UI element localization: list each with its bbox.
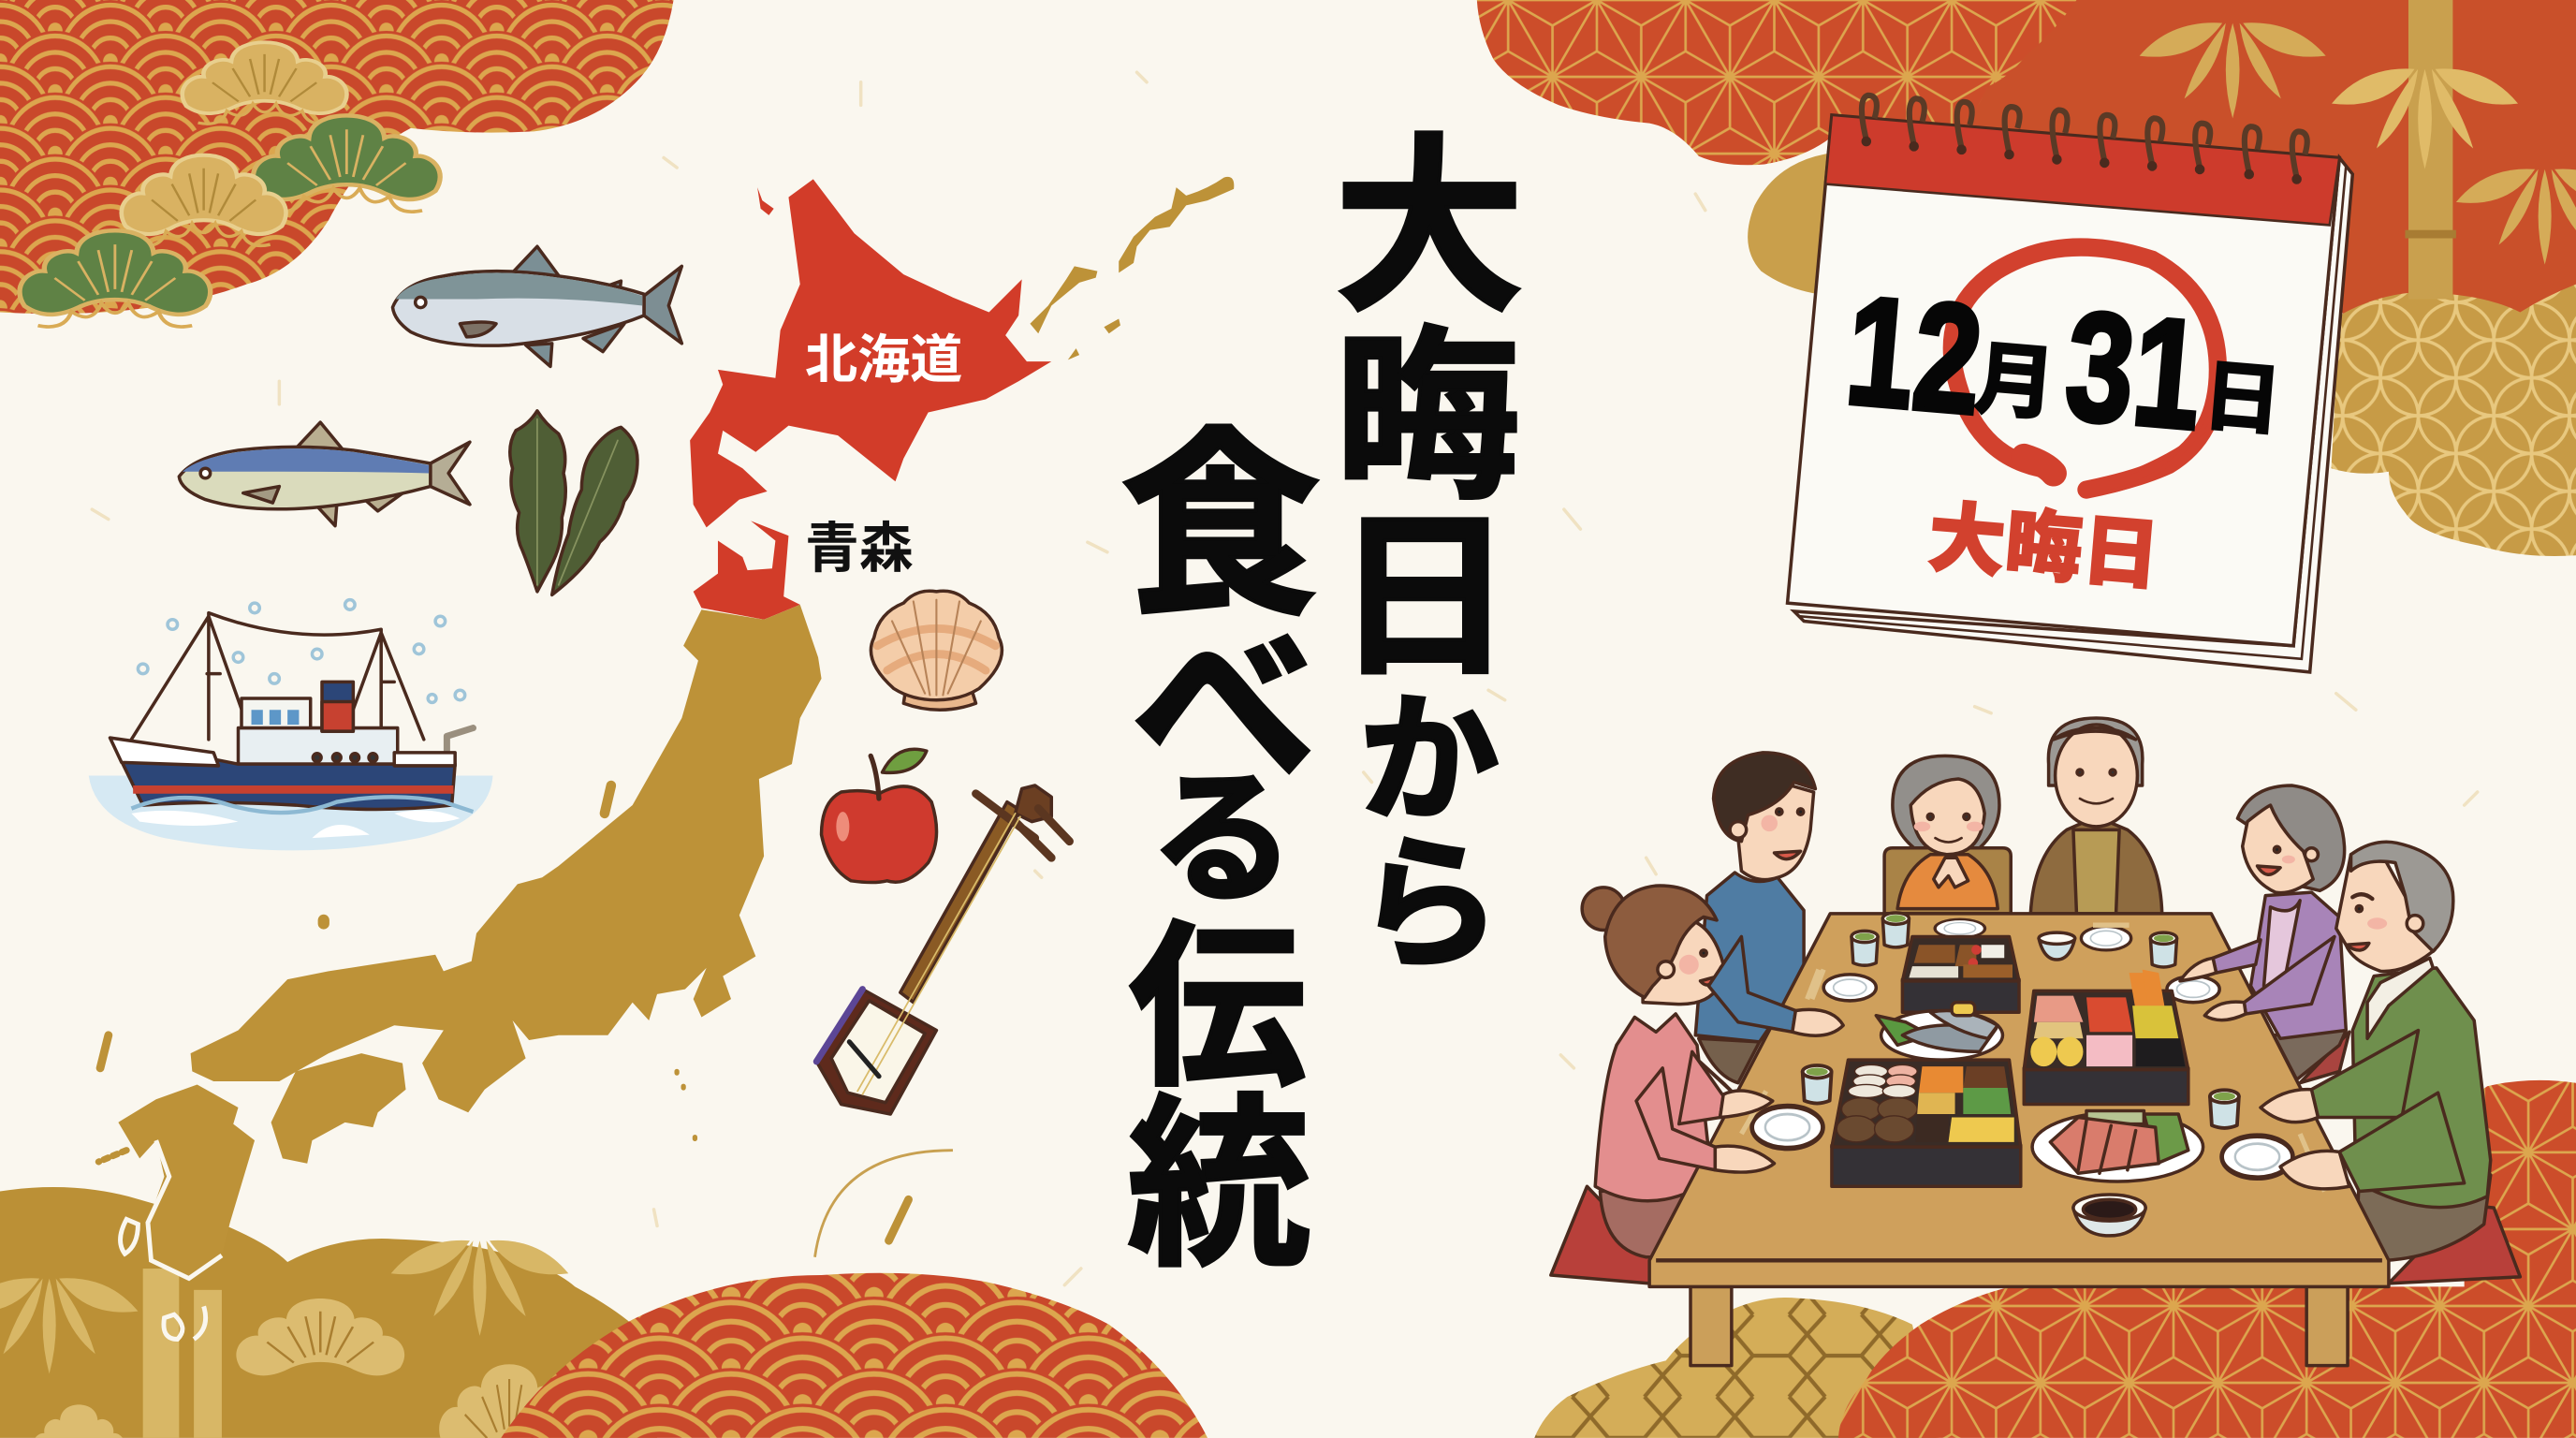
gold circle behind calendar <box>1748 151 1856 296</box>
Honshu <box>191 605 822 1112</box>
small islands <box>98 785 909 1240</box>
shippo gold panel <box>2331 285 2576 556</box>
daughter, pink sweater body and head <box>1551 886 1738 1284</box>
べ: べ <box>1132 606 1316 812</box>
top-right red backdrop with asanoha <box>1477 0 2576 556</box>
calendar <box>1788 95 2352 672</box>
icon: kelp <box>510 411 637 594</box>
Shikoku <box>271 1053 406 1164</box>
Rishiri island <box>757 187 774 215</box>
red header <box>1825 115 2339 225</box>
grandfather centre <box>2030 718 2162 914</box>
Aomori <box>694 521 800 620</box>
Hokkaido <box>690 179 1051 527</box>
rigging <box>131 613 424 740</box>
bottom-right gold hexagon panel <box>1534 1298 1939 1438</box>
bamboo leaves <box>0 1240 568 1373</box>
green tea cups <box>1803 913 2239 1128</box>
arms and hands over the table <box>1636 936 2465 1192</box>
small dish of kuromame <box>2073 1195 2145 1236</box>
る: る <box>1150 758 1295 920</box>
Kuril islands <box>1030 177 1234 360</box>
31: 31 <box>2060 279 2208 462</box>
daughter arms <box>1679 1051 1723 1124</box>
son arm <box>1708 936 1795 1032</box>
page stack <box>1794 158 2352 672</box>
食: 食 <box>1120 416 1321 639</box>
か: か <box>1359 682 1500 839</box>
right man, green sweater body and head <box>2336 842 2520 1284</box>
title: right column <box>1334 123 1525 986</box>
label: Aomori: 青森 <box>805 505 914 583</box>
family dinner scene <box>1551 718 2520 1366</box>
bottom-right asanoha panel <box>1838 1080 2576 1438</box>
table legs <box>1690 1286 2348 1366</box>
日: 日 <box>2199 332 2287 452</box>
gold pine 2 <box>122 155 286 245</box>
icon: scallop <box>871 591 1002 710</box>
right woman arms <box>2213 940 2261 973</box>
sea <box>89 775 493 850</box>
12: 12 <box>1840 264 1988 447</box>
bubbles <box>138 600 465 702</box>
table top <box>1649 914 2389 1286</box>
jubako box: right <box>2024 970 2188 1105</box>
ら: ら <box>1357 824 1501 986</box>
bamboo stalk <box>2405 0 2456 299</box>
晦: 晦 <box>1335 314 1520 521</box>
pine decorations, top left <box>20 42 440 327</box>
title: left column <box>1120 416 1321 1288</box>
plate of grilled fish <box>1876 1003 2002 1060</box>
icon: apple <box>822 749 937 883</box>
green pine 2 <box>20 230 211 327</box>
cabin <box>238 682 473 764</box>
plate of roast meat <box>2032 1111 2203 1181</box>
hull <box>110 738 455 809</box>
伝: 伝 <box>1129 910 1306 1108</box>
icon: shamisen <box>816 785 1070 1114</box>
jubako box: bottom <box>1832 1060 2021 1186</box>
icon: fishing boat <box>89 600 493 850</box>
page <box>1788 115 2339 646</box>
sea waves <box>131 797 473 813</box>
Kyushu white coast and islets <box>121 1140 222 1340</box>
plates and bowls <box>1741 919 2324 1192</box>
bamboo stalks <box>143 1269 222 1438</box>
paper fibre flecks <box>92 72 2478 1285</box>
icon: salmon <box>392 246 681 366</box>
date text <box>1840 261 2291 473</box>
bottom-centre seigaiha panel <box>501 1273 1208 1438</box>
日: 日 <box>1336 499 1513 697</box>
label: Hokkaido: 北海道 <box>805 318 962 394</box>
son, blue sweater body and head <box>1695 753 1815 1083</box>
right woman, purple cardigan body and head <box>2237 785 2349 1083</box>
grandmother centre <box>1884 756 2011 914</box>
right man arms <box>2311 1031 2419 1118</box>
ink circle <box>1952 247 2217 493</box>
binding rings <box>1862 95 2307 179</box>
green pine 1 <box>253 115 440 212</box>
Kyushu <box>118 1084 255 1279</box>
red label: 大晦日 <box>1925 474 2164 606</box>
top-left seigaiha wave panel <box>0 0 674 314</box>
tan pines <box>32 1299 579 1438</box>
bamboo leaves <box>2140 22 2576 265</box>
Ogasawara arc <box>815 1151 953 1257</box>
map of Japan <box>98 177 1234 1340</box>
icon: herring <box>179 422 470 526</box>
大: 大 <box>1334 123 1525 335</box>
gold pine 1 <box>183 42 346 124</box>
asanoha panel <box>1477 0 2076 165</box>
jubako box: top <box>1902 936 2019 1012</box>
bottom-left gold panel with bamboo and pine <box>0 1187 657 1438</box>
統: 統 <box>1127 1082 1311 1288</box>
月: 月 <box>1969 313 2061 438</box>
